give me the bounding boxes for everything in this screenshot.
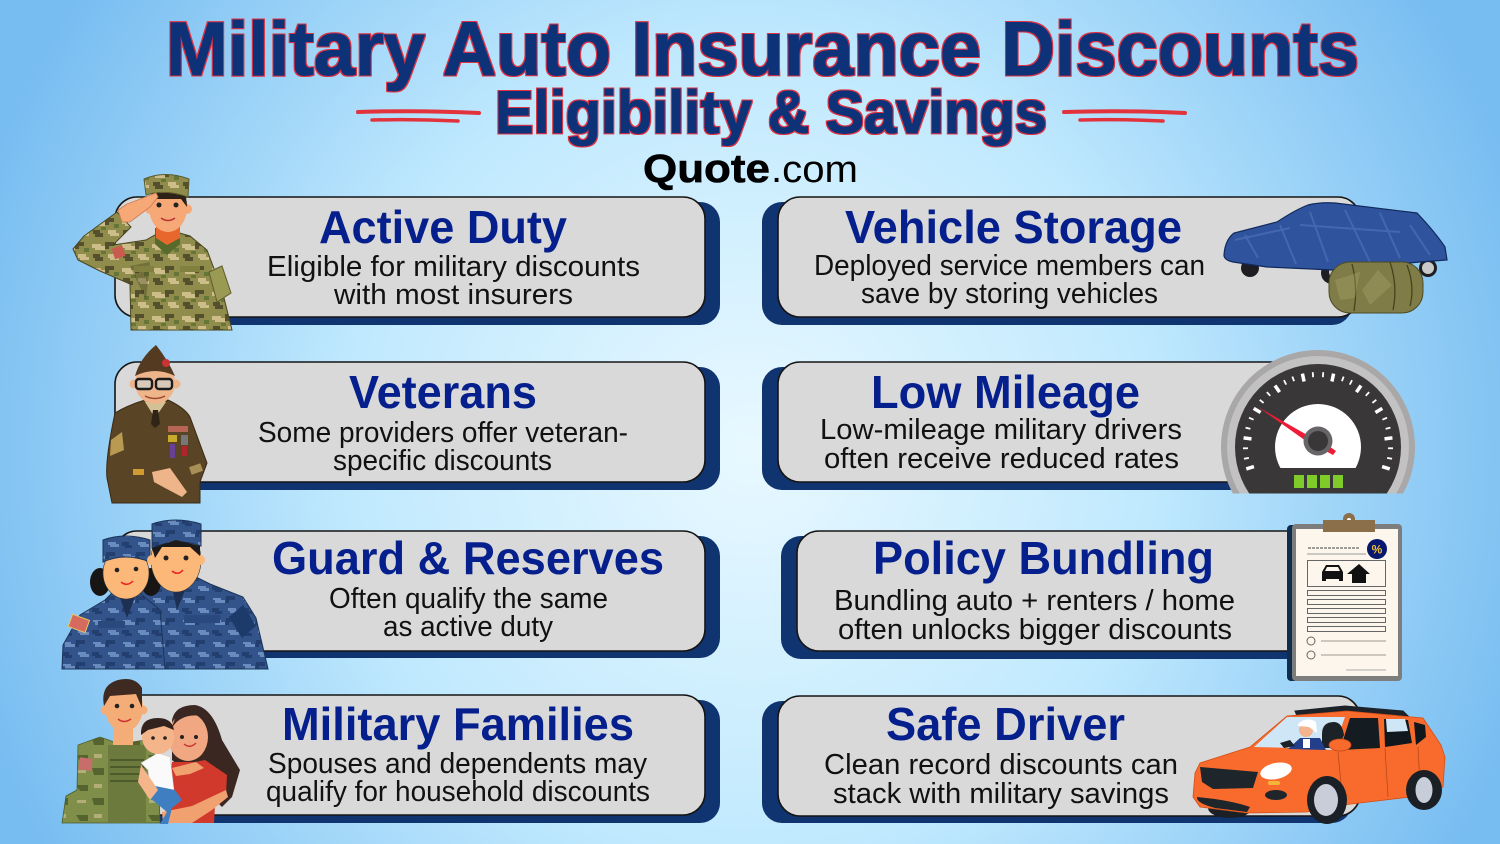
text: policy bundling: Bundling auto + renters / home (834, 585, 1235, 617)
heading: vehicle storage: Vehicle Storage (845, 201, 1182, 253)
text: policy bundling: often unlocks bigger discounts (838, 614, 1232, 646)
brand logo: .com (771, 149, 858, 191)
text: safe driver: stack with military savings (833, 778, 1169, 810)
text: guard and reserves: Often qualify the same (329, 583, 608, 615)
text: active duty: Eligible for military discounts (267, 251, 640, 283)
text: vehicle storage: Deployed service members can (814, 250, 1205, 282)
icon: clipboard: % (1372, 542, 1383, 556)
panel: military families (115, 695, 720, 823)
text: military families: Spouses and dependents may (268, 748, 647, 780)
subtitle: Eligibility & Savings (495, 79, 1047, 146)
text: low mileage: often receive reduced rates (824, 443, 1179, 475)
panel: guard and reserves (115, 531, 720, 658)
panel: veterans (115, 362, 720, 490)
text: safe driver (824, 749, 1178, 810)
text: policy bundling (834, 585, 1235, 646)
icon: speedometer (1221, 350, 1415, 494)
icon: guard and reserve couple (62, 520, 268, 669)
text: safe driver: Clean record discounts can (824, 749, 1178, 781)
text: low mileage: Low-mileage military drivers (820, 414, 1182, 446)
icon: military family (62, 679, 240, 824)
heading: safe driver: Safe Driver (886, 698, 1125, 750)
heading: veterans: Veterans (349, 366, 537, 418)
text: guard and reserves: as active duty (383, 611, 553, 643)
panel: policy bundling (781, 531, 1317, 659)
text: military families: qualify for household discounts (266, 776, 650, 808)
heading: guard and reserves: Guard & Reserves (272, 532, 664, 584)
brand logo: Quote (643, 147, 770, 191)
icon: saluting soldier (73, 174, 232, 330)
icon: orange car (1193, 706, 1445, 824)
icon: veteran (107, 345, 207, 503)
text: low mileage (820, 414, 1182, 475)
heading: military families: Military Families (282, 698, 634, 750)
text: vehicle storage: save by storing vehicles (861, 278, 1158, 310)
left red underline (358, 111, 479, 121)
text: active duty: with most insurers (333, 279, 573, 311)
text: vehicle storage (814, 250, 1205, 310)
brand logo (643, 147, 858, 191)
panel: active duty (115, 197, 720, 325)
icon: covered car and duffel bag (1224, 203, 1447, 313)
panel: safe driver (762, 696, 1360, 823)
icon: clipboard (1287, 513, 1402, 681)
text: veterans: specific discounts (333, 445, 552, 477)
heading: active duty: Active Duty (319, 201, 567, 253)
title: Military Auto Insurance Discounts (166, 7, 1359, 92)
text: veterans: Some providers offer veteran- (258, 417, 628, 449)
heading: low mileage: Low Mileage (871, 366, 1140, 418)
text: military families (266, 748, 650, 808)
text: veterans (258, 417, 628, 477)
text: active duty (267, 251, 640, 311)
text: guard and reserves (329, 583, 608, 643)
panel: vehicle storage (762, 197, 1360, 325)
panel: low mileage (762, 362, 1318, 490)
right red underline (1064, 111, 1185, 121)
heading: policy bundling: Policy Bundling (873, 532, 1214, 584)
